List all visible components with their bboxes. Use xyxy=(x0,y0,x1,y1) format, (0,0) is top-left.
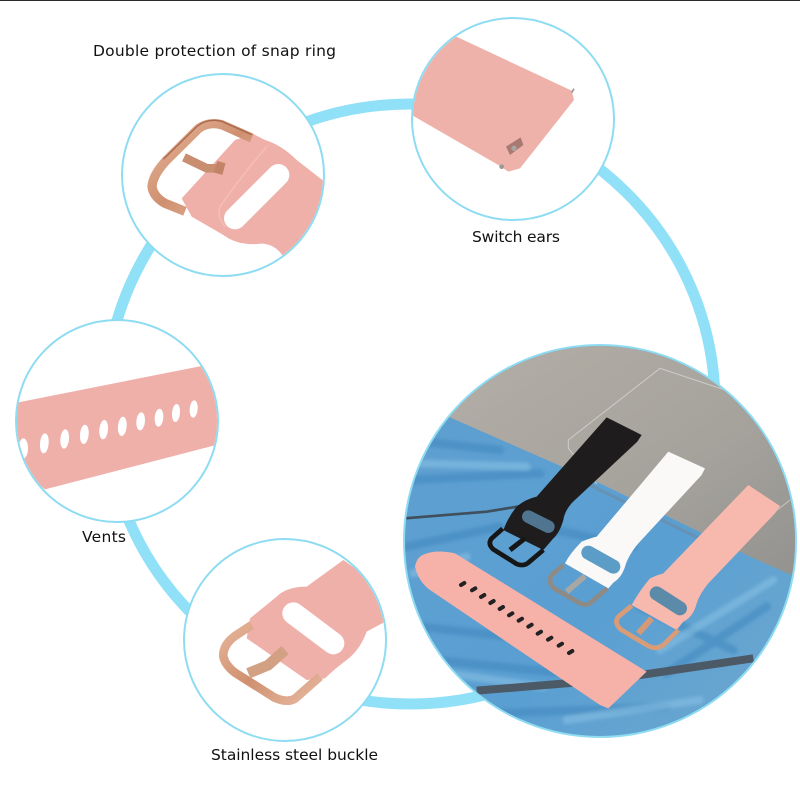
pink strap with buckle xyxy=(152,120,327,257)
panel: switch ears xyxy=(403,18,614,220)
pink strap end with spring bar xyxy=(403,33,574,172)
pink strap with rose gold buckle xyxy=(632,485,780,630)
panel: double protection of snap ring xyxy=(122,74,327,276)
top edge line xyxy=(0,0,800,1)
circle frame xyxy=(16,320,218,522)
panel: product photo with three straps xyxy=(404,333,800,737)
photo circle frame xyxy=(404,345,796,737)
panel: vents xyxy=(10,320,223,522)
white strap xyxy=(565,452,705,588)
label: switch ears: Switch ears xyxy=(472,228,560,246)
connecting ring xyxy=(105,104,715,704)
pink strap with buckle xyxy=(223,560,388,701)
laptop xyxy=(448,333,800,577)
plank grooves xyxy=(405,506,753,691)
bottom pink strap xyxy=(415,551,647,708)
circle frame xyxy=(412,18,614,220)
photo contents xyxy=(405,333,800,720)
circle frame xyxy=(122,74,324,276)
black strap xyxy=(503,417,642,550)
circle frame xyxy=(184,539,386,741)
panel: stainless steel buckle xyxy=(184,539,388,741)
pink strap with vent holes xyxy=(10,366,223,489)
label: double protection: Double protection of snap ring xyxy=(93,42,336,60)
label: vents: Vents xyxy=(82,528,126,546)
wood streaks xyxy=(407,440,773,720)
label: stainless steel buckle: Stainless steel buckle xyxy=(211,746,378,764)
